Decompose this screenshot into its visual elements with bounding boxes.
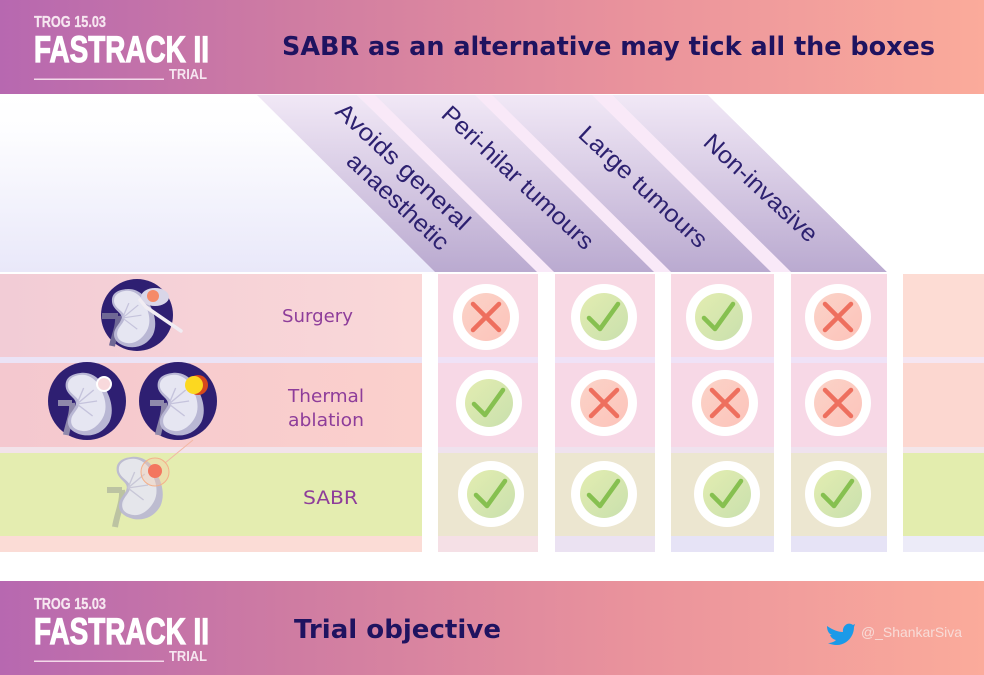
icon: twitter bird <box>827 624 855 645</box>
label: thermal ablation: ablation <box>288 410 364 431</box>
text: trial objective: Trial objective <box>294 615 501 645</box>
marks: SABR row <box>458 461 871 527</box>
panel: diagonal column headers <box>257 95 984 272</box>
label: non-invasive: Non-invasive <box>698 129 823 248</box>
header band: peri-hilar tumours <box>375 95 654 272</box>
text: FASTRACK II: FASTRACK II <box>34 29 209 70</box>
marks: surgery row <box>453 284 871 350</box>
header band: non-invasive <box>612 95 887 272</box>
underline <box>34 78 164 80</box>
underline <box>34 660 164 662</box>
label: avoids general anaesthetic: Avoids general <box>330 98 476 236</box>
icon: surgery kidney <box>101 279 181 351</box>
panel: upper-left sky gradient <box>0 95 435 272</box>
label: peri-hilar tumours: Peri-hilar tumours <box>436 101 599 255</box>
icon: thermal ablation kidney, before <box>48 362 126 440</box>
text: TROG 15.03: TROG 15.03 <box>34 596 106 613</box>
label: thermal ablation: Thermal <box>287 386 364 407</box>
header band: avoids general anaesthetic <box>257 95 537 272</box>
heading: SABR as an alternative may tick all the boxes <box>282 32 935 62</box>
text: FASTRACK II: FASTRACK II <box>34 611 209 652</box>
text: TROG 15.03: TROG 15.03 <box>34 14 106 31</box>
icon: thermal ablation kidney, heated <box>139 362 217 440</box>
label: SABR: SABR <box>303 487 358 509</box>
text: TRIAL: TRIAL <box>169 648 207 665</box>
panel: column 1 cells <box>438 274 538 552</box>
panel: column 2 cells <box>555 274 655 552</box>
marks: thermal ablation row <box>456 370 871 436</box>
text: TRIAL: TRIAL <box>169 66 207 83</box>
text: twitter handle: @_ShankarSiva <box>861 624 962 640</box>
icon: SABR kidney <box>107 440 193 527</box>
header band: large tumours <box>492 95 771 272</box>
label: anaesthetic: anaesthetic <box>341 148 454 256</box>
white corner right of headers <box>708 95 984 272</box>
panel: header banner <box>0 0 984 94</box>
panel: column 3 cells <box>671 274 774 552</box>
panel: pale gaps between diagonal headers <box>357 95 791 272</box>
panel: right edge cells <box>903 274 984 552</box>
label: large tumours: Large tumours <box>573 121 713 254</box>
panel: row backgrounds left <box>0 274 422 552</box>
panel: footer banner <box>0 581 984 675</box>
panel: column 4 cells <box>791 274 887 552</box>
label: thermal ablation <box>287 386 364 431</box>
label: surgery: Surgery <box>282 306 353 327</box>
